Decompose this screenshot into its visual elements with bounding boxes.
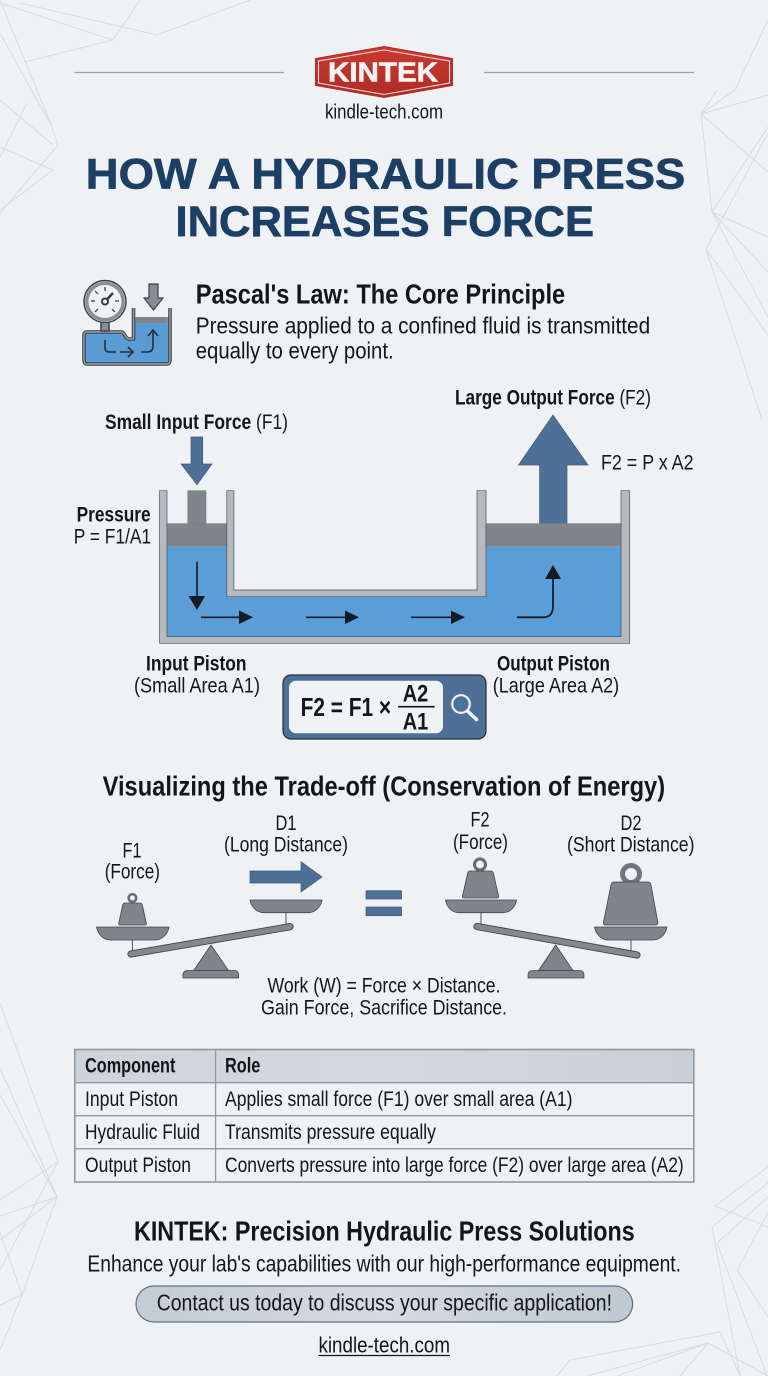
logo: KINTEK (316, 46, 452, 98)
title: INCREASES FORCE (176, 198, 594, 246)
call to action button: Contact us today to discuss your specific application! (157, 1290, 612, 1316)
text: work equation: Work (W) = Force × Distance. (268, 974, 500, 997)
table row: input piston: Input Piston (85, 1087, 178, 1111)
input piston (167, 491, 227, 547)
header rule: left (74, 72, 284, 74)
table header (85, 1055, 260, 1078)
table row: hydraulic fluid: Transmits pressure equally (225, 1120, 436, 1144)
label: pressure (74, 504, 151, 548)
cylinder walls (160, 491, 630, 643)
icon: medium weight (462, 859, 499, 898)
label: F1 force (105, 839, 160, 884)
table header: Role (225, 1055, 260, 1078)
heading: trade-off: Visualizing the Trade-off (Conservation of Energy) (103, 770, 665, 801)
label: F2 force: F2 (470, 809, 490, 832)
label: output piston: (Large Area A2) (493, 675, 619, 698)
table: components and roles (75, 1050, 694, 1182)
label: small input force: Small Input Force (F1) (105, 410, 288, 434)
website link: bottom: kindle-tech.com (318, 1333, 450, 1358)
table row: input piston: Applies small force (F1) over small area (A1) (225, 1087, 572, 1111)
label: large output force: Large Output Force (F2) (455, 385, 651, 409)
label: input piston: Input Piston (146, 653, 246, 676)
header rule: right (484, 72, 694, 74)
icon: small weight (119, 894, 146, 925)
label: D1 long distance: D1 (276, 812, 296, 835)
text: Pascal's Law description: Pressure applied to a confined fluid is transmitted (196, 312, 650, 338)
text: Pascal's Law description: equally to every point. (196, 338, 394, 364)
logo: KINTEK: KINTEK (328, 57, 438, 88)
call to action button (136, 1286, 633, 1322)
table row: input piston (85, 1087, 572, 1111)
formula box: F2 = F1 × (301, 692, 391, 722)
label: F2 force (453, 809, 508, 854)
text: Pascal's Law description (196, 312, 650, 364)
label: D2 short distance: (Short Distance) (567, 834, 694, 857)
label: output piston (493, 653, 619, 698)
label: D1 long distance (224, 812, 348, 857)
label: output piston: Output Piston (497, 653, 610, 676)
table row: hydraulic fluid: Hydraulic Fluid (85, 1120, 200, 1144)
text: work equation (261, 974, 507, 1019)
table row: output piston: Output Piston (85, 1153, 191, 1177)
title (86, 150, 685, 246)
label: D2 short distance (567, 812, 694, 857)
label: D2 short distance: D2 (620, 812, 642, 835)
heading: Pascal's Law: Pascal's Law: The Core Principle (196, 278, 565, 309)
label: F2 force: (Force) (453, 831, 508, 854)
icon: pressure gauge and tank (84, 280, 170, 364)
label: F1 force: (Force) (105, 860, 160, 884)
title: HOW A HYDRAULIC PRESS (86, 150, 685, 198)
output piston (486, 523, 621, 547)
label: F2 equation: F2 = P x A2 (601, 451, 694, 474)
label: pressure: P = F1/A1 (74, 525, 151, 548)
equals sign (366, 891, 402, 916)
table row: hydraulic fluid (85, 1120, 436, 1144)
right balance scale (446, 859, 667, 978)
hydraulic press diagram (160, 415, 630, 643)
label: input piston: (Small Area A1) (134, 675, 260, 698)
fluid flow arrows (189, 562, 561, 624)
label: D1 long distance: (Long Distance) (224, 834, 348, 857)
icon: magnifier (452, 695, 476, 720)
fluid (167, 547, 621, 637)
website link: top: kindle-tech.com (325, 102, 443, 124)
output force arrow (518, 415, 588, 523)
text: work equation: Gain Force, Sacrifice Distance. (261, 996, 507, 1019)
formula box: A1 (403, 708, 428, 736)
input force arrow (181, 437, 212, 485)
left balance scale (96, 894, 322, 978)
icon: distance arrow (250, 862, 322, 892)
label: pressure: Pressure (77, 504, 151, 527)
label: input piston (134, 653, 260, 698)
table row: output piston (85, 1153, 684, 1177)
table header: Component (85, 1055, 175, 1078)
formula box: A2 (403, 681, 428, 708)
label: F1 force: F1 (122, 839, 142, 862)
icon: large weight (603, 866, 658, 925)
footer heading: KINTEK: Precision Hydraulic Press Solutions (134, 1216, 635, 1247)
formula box (283, 675, 486, 739)
